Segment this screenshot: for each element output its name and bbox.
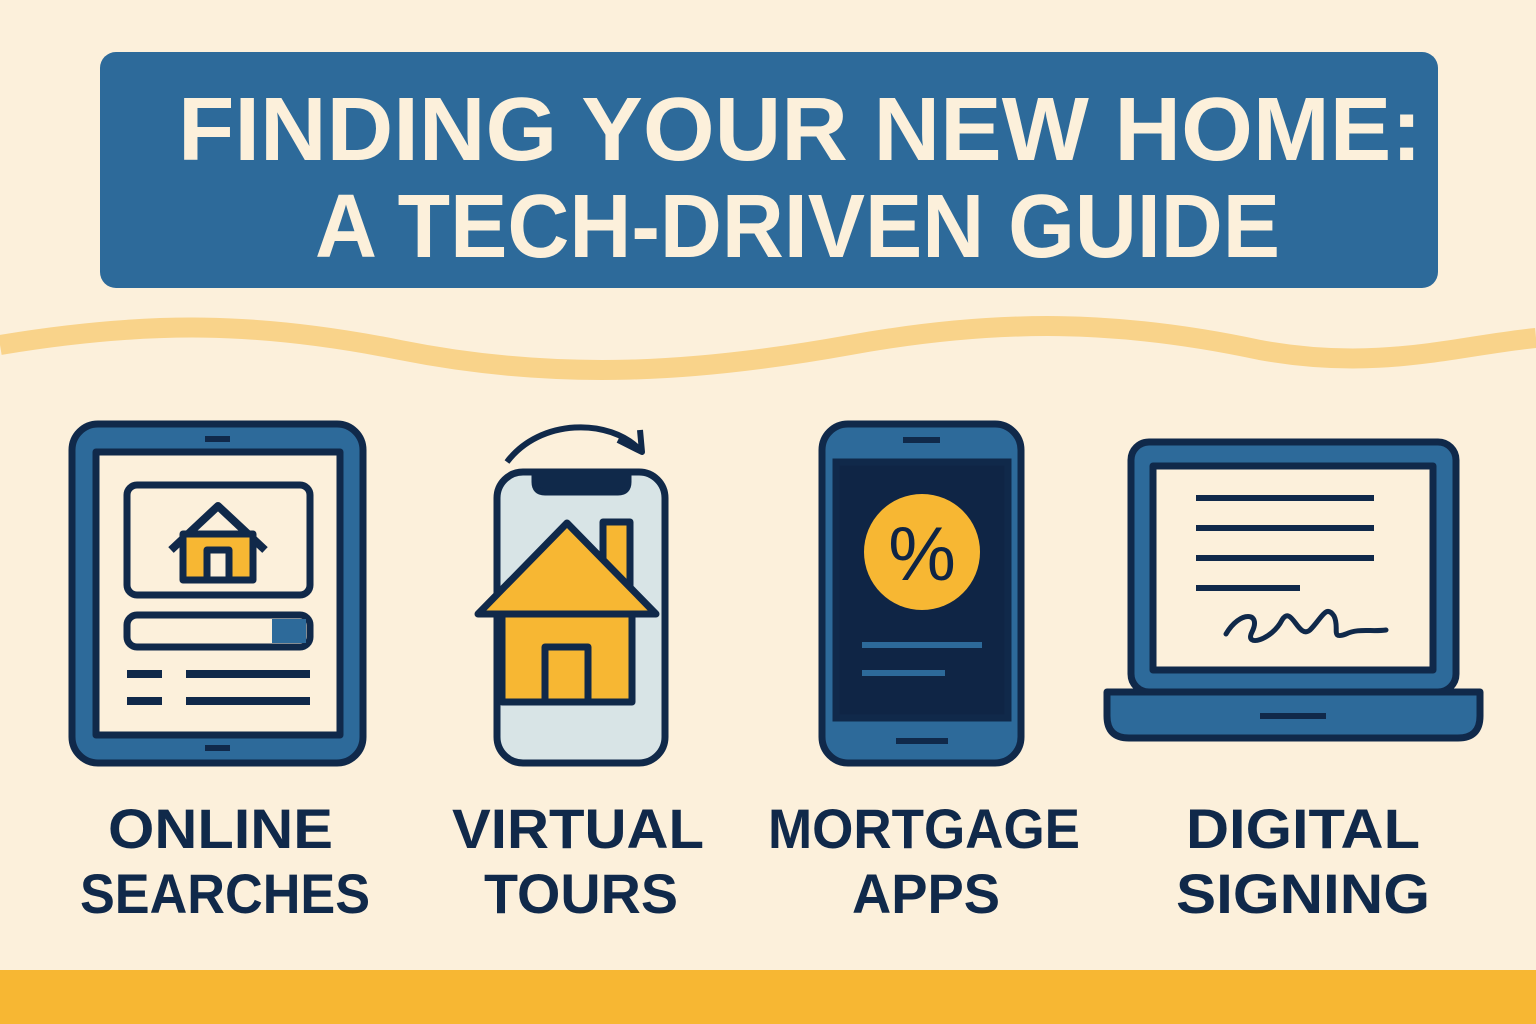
icon: phone with percent (mortgage apps): %	[888, 512, 956, 597]
label: virtual tours	[452, 797, 704, 925]
label: virtual tours: TOURS	[484, 862, 678, 925]
wave divider	[0, 326, 1536, 370]
label: mortgage apps	[768, 797, 1080, 925]
bottom band	[0, 970, 1536, 1024]
label: digital signing: DIGITAL	[1186, 797, 1420, 860]
label: mortgage apps: MORTGAGE	[768, 797, 1080, 860]
label: online searches: ONLINE	[108, 797, 333, 860]
label: virtual tours: VIRTUAL	[452, 797, 704, 860]
icon: laptop (digital signing)	[1107, 442, 1480, 738]
label: mortgage apps: APPS	[852, 862, 1000, 925]
title banner: FINDING YOUR NEW HOME:	[178, 80, 1422, 180]
title banner	[100, 52, 1438, 288]
label: online searches: SEARCHES	[80, 862, 370, 925]
icon: phone with house (virtual tours)	[478, 427, 665, 763]
icon: phone with percent (mortgage apps)	[822, 424, 1021, 763]
icon: tablet (online searches)	[72, 424, 363, 763]
label: online searches	[80, 797, 370, 925]
label: digital signing: SIGNING	[1176, 862, 1430, 925]
title banner: A TECH-DRIVEN GUIDE	[315, 177, 1280, 277]
label: digital signing	[1176, 797, 1430, 925]
